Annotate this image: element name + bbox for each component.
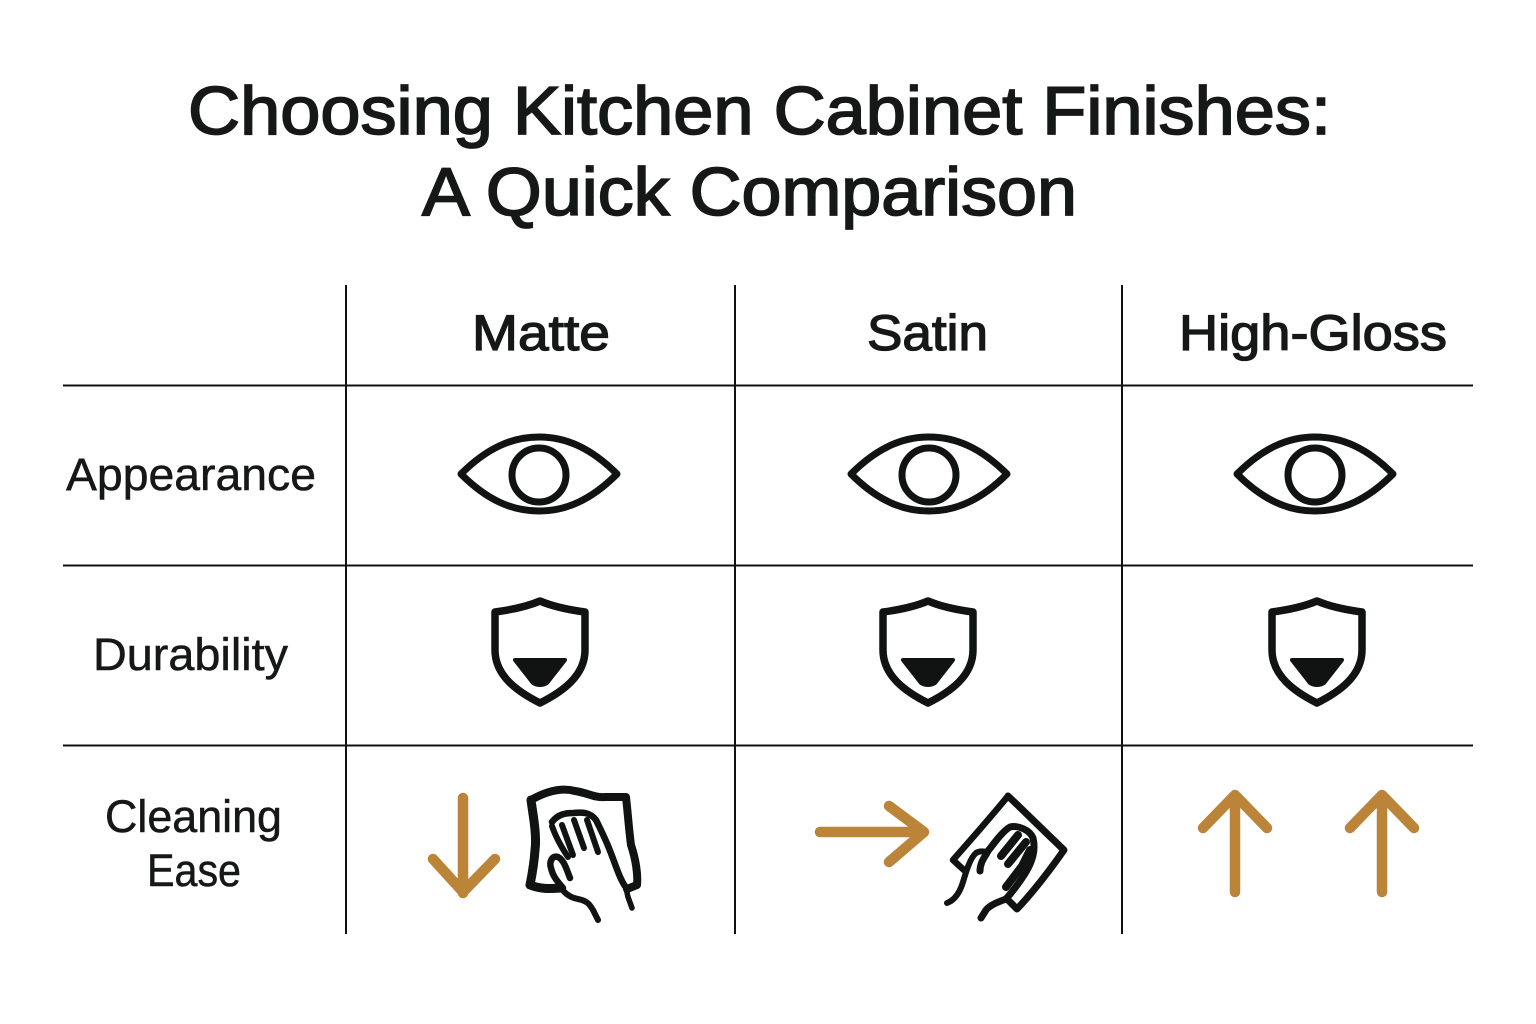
title: A Quick Comparison: [422, 154, 1077, 230]
column heading: Satin: Satin: [867, 305, 988, 361]
title: [188, 73, 1331, 230]
icon: hand wiping cloth, satin: [947, 796, 1064, 918]
row label: Cleaning Ease: Ease: [147, 845, 241, 896]
column heading: High-Gloss: High-Gloss: [1179, 305, 1447, 361]
arrow: high-gloss cleaning up, first: [1203, 795, 1267, 892]
column heading: Matte: Matte: [472, 305, 610, 361]
row label: Cleaning Ease: [105, 791, 282, 896]
arrow: satin cleaning neutral: [820, 806, 924, 862]
icon: shield, high-gloss durability: [1272, 601, 1362, 703]
row label: Appearance: Appearance: [66, 449, 316, 500]
row label: Durability: Durability: [93, 629, 289, 680]
icon: hand wiping cloth, matte: [530, 790, 637, 920]
arrow: high-gloss cleaning up, second: [1350, 795, 1414, 892]
icon: eye, high-gloss appearance: [1237, 437, 1393, 511]
icon: shield, satin durability: [883, 601, 973, 703]
icon: shield, matte durability: [495, 601, 585, 703]
title: Choosing Kitchen Cabinet Finishes:: [188, 73, 1331, 149]
icon: eye, satin appearance: [851, 437, 1007, 511]
row label: Cleaning Ease: Cleaning: [105, 791, 282, 842]
arrow: matte cleaning down: [433, 798, 495, 893]
icon: eye, matte appearance: [461, 437, 617, 511]
